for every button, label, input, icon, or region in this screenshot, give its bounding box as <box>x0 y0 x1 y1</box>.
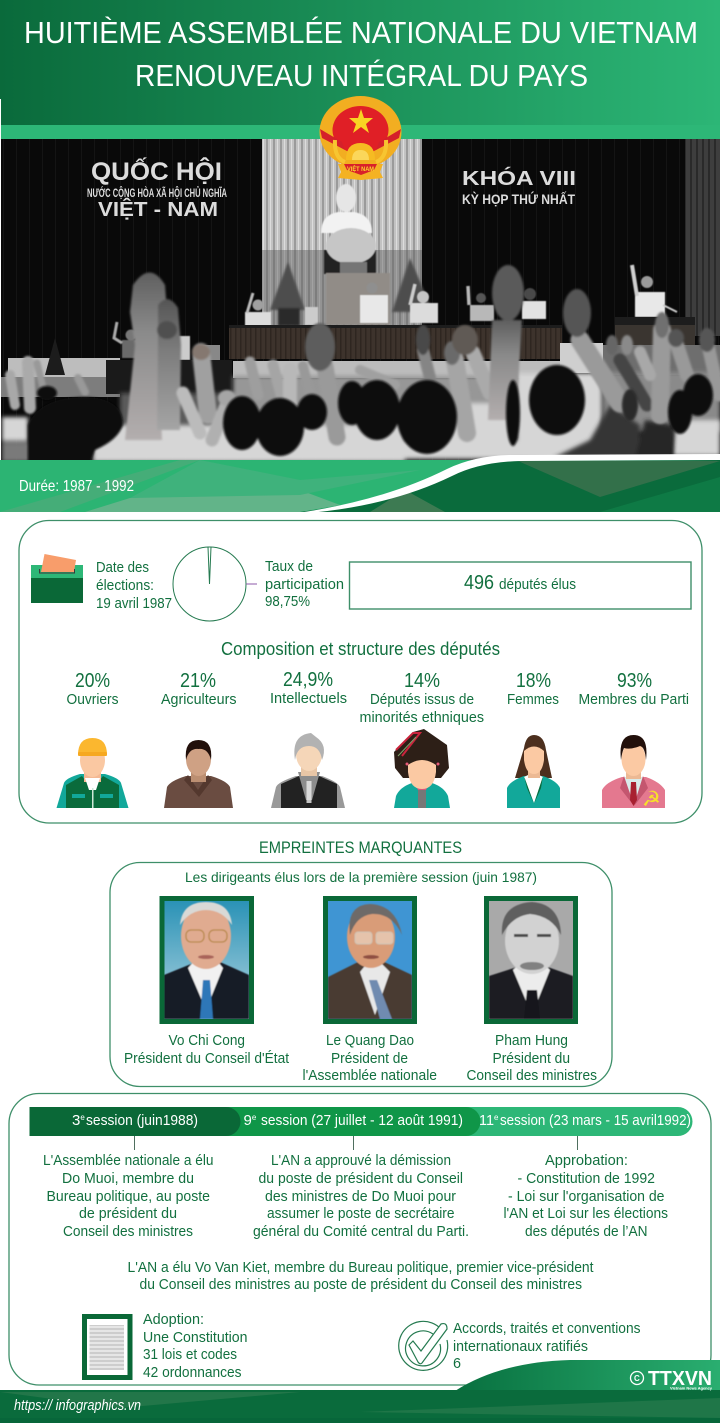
caption: Vo Chi Cong: Président du Conseil d'État <box>124 1050 290 1067</box>
session 11 text: des députés de l’AN <box>525 1223 648 1240</box>
Vo Van Kiet text: du Conseil des ministres au poste de président du Conseil des ministres <box>140 1276 582 1293</box>
stat: workers <box>66 670 118 708</box>
stat: intellectuals: 24,9% <box>283 669 333 691</box>
footer <box>0 1360 720 1423</box>
icon: farmer <box>164 740 233 808</box>
TTXVN logo: TTXVN <box>648 1368 712 1390</box>
wall lettering: KHÓA VIII <box>462 166 576 190</box>
stat: women <box>507 670 559 708</box>
stat: workers: Ouvriers <box>66 691 118 708</box>
session 9 text: général du Comité central du Parti. <box>253 1223 469 1240</box>
stage, tables and floor <box>0 317 720 397</box>
stat: farmers: Agriculteurs <box>161 691 236 708</box>
election date: Date des <box>96 559 149 576</box>
wall lettering <box>87 156 576 221</box>
session 3 text <box>43 1152 214 1240</box>
caption: Pham Hung: Président du <box>492 1050 570 1067</box>
stat: women: 18% <box>516 670 551 692</box>
wall lettering: VIỆT - NAM <box>98 197 218 221</box>
stat: ethnic minorities: Députés issus de <box>370 691 474 708</box>
pie chart: turnout <box>173 547 257 621</box>
national emblem <box>320 96 402 180</box>
caption: Pham Hung <box>466 1032 597 1084</box>
Vo Van Kiet text <box>128 1259 594 1293</box>
footer url: https:// infographics.vn <box>14 1397 141 1414</box>
session 9 text: du poste de président du Conseil <box>258 1170 463 1187</box>
treaties text: Accords, traités et conventions <box>453 1320 640 1337</box>
crowd: mid-tone backdrop <box>120 372 720 436</box>
turnout: Taux de <box>265 558 313 575</box>
panel: sessions timeline <box>9 1094 711 1385</box>
caption: Pham Hung: Conseil des ministres <box>466 1067 597 1084</box>
adoption text: Adoption: <box>143 1311 204 1328</box>
presidium members <box>114 265 677 360</box>
icon: party member <box>602 735 665 811</box>
stat: farmers: 21% <box>180 670 216 692</box>
icon: intellectual <box>271 733 345 808</box>
icon: woman <box>507 735 560 808</box>
icon: check mark <box>399 1321 448 1370</box>
adoption text: Une Constitution <box>143 1329 248 1346</box>
timeline bar: 3 <box>72 1112 80 1129</box>
session 9 text: des ministres de Do Muoi pour <box>265 1188 456 1205</box>
timeline bar: e <box>252 1113 257 1122</box>
portrait: Vo Chi Cong <box>160 896 254 1024</box>
timeline bar: session (juin1988) <box>86 1112 198 1129</box>
session 3 text: Do Muoi, membre du <box>62 1170 194 1187</box>
icon: worker <box>56 738 128 808</box>
caption: Vo Chi Cong <box>124 1032 290 1067</box>
curtain backdrop <box>262 139 720 336</box>
caption: Le Quang Dao: l'Assemblée nationale <box>302 1067 437 1084</box>
stat: intellectuals <box>270 669 347 707</box>
duration band <box>0 454 720 515</box>
photo: assembly session with raised hands <box>0 139 720 464</box>
crowd: dark sleeves <box>553 405 675 458</box>
caption: Le Quang Dao <box>302 1032 437 1084</box>
session 9 text <box>253 1152 469 1240</box>
stat: ethnic minorities: minorités ethniques <box>360 709 484 726</box>
turnout: 98,75% <box>265 593 310 610</box>
duration label: Durée: 1987 - 1992 <box>19 478 134 495</box>
timeline bar: e <box>80 1113 85 1122</box>
adoption text <box>143 1311 248 1381</box>
heading: composition: Composition et structure des députés <box>221 639 500 659</box>
crowd: raised arms and hands <box>10 265 719 440</box>
wall lettering: NƯỚC CỘNG HÒA XÃ HỘI CHỦ NGHĨA <box>87 185 227 200</box>
panel: leaders elected at the first session <box>110 862 612 1086</box>
treaties text <box>453 1320 640 1372</box>
stat: party members <box>578 670 689 708</box>
session 9 text: L'AN a approuvé la démission <box>271 1152 451 1169</box>
stat: ethnic minorities: 14% <box>404 670 440 692</box>
TTXVN logo: Vietnam News Agency <box>670 1386 712 1390</box>
national emblem: VIỆT NAM <box>347 165 374 173</box>
caption: Pham Hung: Pham Hung <box>495 1032 568 1049</box>
election date: élections: <box>96 577 154 594</box>
caption: Le Quang Dao: Le Quang Dao <box>326 1032 414 1049</box>
title <box>24 15 698 93</box>
stat: party members: 93% <box>617 670 652 692</box>
adoption text: 42 ordonnances <box>143 1364 242 1381</box>
icon: ethnic minority deputy <box>394 729 450 808</box>
title: RENOUVEAU INTÉGRAL DU PAYS <box>135 58 588 93</box>
session 11 text: - Constitution de 1992 <box>518 1170 655 1187</box>
session 3 text: de président du <box>79 1205 177 1222</box>
timeline bar <box>30 1107 692 1150</box>
stat: workers: 20% <box>75 670 110 692</box>
portrait: Pham Hung <box>484 896 578 1024</box>
session 3 text: L'Assemblée nationale a élu <box>43 1152 214 1169</box>
Vo Van Kiet text: L'AN a élu Vo Van Kiet, membre du Bureau politique, premier vice-président <box>128 1259 594 1276</box>
stat: ethnic minorities <box>360 670 484 726</box>
caption: Vo Chi Cong: Vo Chi Cong <box>168 1032 245 1049</box>
wall lettering: QUỐC HỘI <box>91 156 222 186</box>
plants <box>270 258 433 326</box>
timeline bar: session (27 juillet - 12 août 1991) <box>261 1112 463 1129</box>
panel: election figures and composition of deputies <box>19 520 702 823</box>
adoption text: 31 lois et codes <box>143 1346 237 1363</box>
TTXVN logo: C <box>634 1374 640 1383</box>
portrait: Le Quang Dao <box>323 896 417 1024</box>
stat: women: Femmes <box>507 691 559 708</box>
timeline bar: 9 <box>244 1112 252 1129</box>
treaties text: 6 <box>453 1355 461 1372</box>
deputies elected box: députés élus <box>499 576 576 593</box>
turnout <box>265 558 344 610</box>
header banner <box>0 0 720 464</box>
session 3 text: Conseil des ministres <box>63 1223 193 1240</box>
subheading: Les dirigeants élus lors de la première session (juin 1987) <box>185 869 537 885</box>
crowd: heads <box>28 365 713 462</box>
timeline bar: session (23 mars - 15 avril1992) <box>500 1112 691 1129</box>
icon: ballot box <box>31 554 83 603</box>
crowd: shirts <box>2 373 720 462</box>
session 11 text: l'AN et Loi sur les élections <box>504 1205 668 1222</box>
icon: party member: ☭ <box>642 787 661 811</box>
session 11 text: Approbation: <box>545 1152 628 1169</box>
deputies elected box <box>350 562 691 609</box>
bust, flowers and podium <box>321 184 390 325</box>
turnout: participation <box>265 576 344 593</box>
timeline bar: 11 <box>479 1112 494 1129</box>
election date: 19 avril 1987 <box>96 595 172 612</box>
icon: document <box>84 1316 130 1378</box>
session 11 text: - Loi sur l'organisation de <box>508 1188 664 1205</box>
session 3 text: Bureau politique, au poste <box>46 1188 210 1205</box>
stat: party members: Membres du Parti <box>578 691 689 708</box>
caption: Le Quang Dao: Président de <box>331 1050 408 1067</box>
timeline bar: e <box>494 1113 499 1122</box>
election date <box>96 559 172 612</box>
treaties text: internationaux ratifiés <box>453 1338 588 1355</box>
wall lettering: KỲ HỌP THỨ NHẤT <box>462 190 575 207</box>
deputies elected box: 496 <box>464 572 494 594</box>
session 9 text: assumer le poste de secrétaire <box>267 1205 454 1222</box>
heading: empreintes marquantes: EMPREINTES MARQUANTES <box>259 838 462 857</box>
stat: farmers <box>161 670 236 708</box>
stat: intellectuals: Intellectuels <box>270 690 347 707</box>
session 11 text <box>504 1152 668 1240</box>
